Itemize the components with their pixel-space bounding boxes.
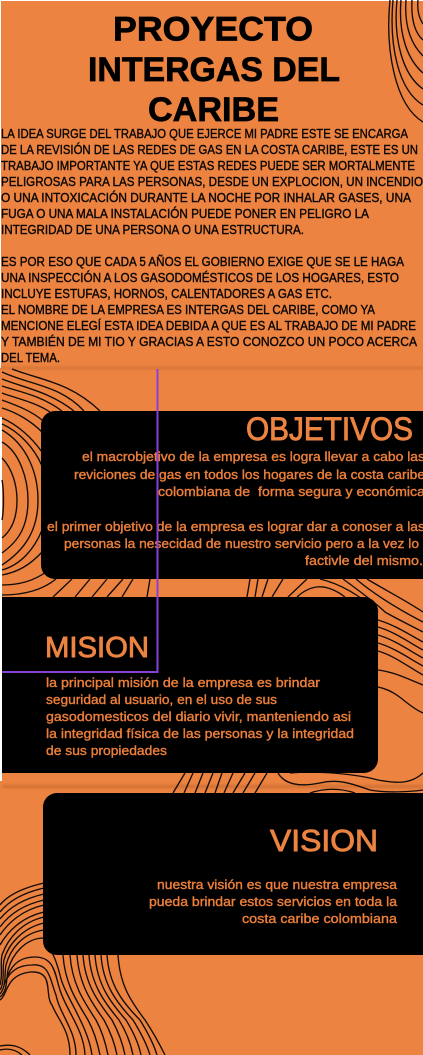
intro text block: UNA INSPECCIÓN A LOS GASODOMÉSTICOS DE LOS HOGARES, ESTO [1,270,399,285]
heading: vision: VISION [270,823,378,858]
section shadows [0,367,423,788]
mision text: de sus propiedades [46,743,168,758]
objetivos text: personas la nesecidad de nuestro servicio pero a la vez lo [64,536,419,551]
purple frame line [2,369,158,672]
contour lines: bottom left [0,883,165,1055]
vision text: pueda brindar estos servicios en toda la [149,894,398,909]
mision text [46,675,354,758]
objetivos text: colombiana de forma segura y económica [158,484,423,499]
contour lines: middle left [2,369,150,597]
vision text [149,877,398,926]
title: INTERGAS DEL [88,51,340,89]
mision text: seguridad al usuario, en el uso de sus [46,692,278,707]
title: PROYECTO [113,10,313,48]
top and left page edge [0,0,423,781]
contour lines: top right [389,0,423,122]
panel: objetivos [41,411,423,579]
vision text: costa caribe colombiana [242,911,398,926]
contour lines: middle right [173,579,423,793]
objetivos text: el macrobjetivo de la empresa es logra llevar a cabo las [82,449,423,464]
intro text block: DEL TEMA. [1,351,60,365]
intro text block [1,127,423,365]
objetivos text: factivle del mismo. [305,553,423,568]
heading: objetivos: OBJETIVOS [246,411,413,447]
mision text: gasodomesticos del diario vivir, manteniendo asi [46,709,351,724]
objetivos text: el primer objetivo de la empresa es lograr dar a conoser a las [47,519,423,534]
intro text block: O UNA INTOXICACIÓN DURANTE LA NOCHE POR INHALAR GASES, UNA [1,190,412,205]
intro text block: Y TAMBIÉN DE MI TIO Y GRACIAS A ESTO CONOZCO UN POCO ACERCA [1,334,418,349]
title: CARIBE [148,91,279,129]
intro text block: INCLUYE ESTUFAS, HORNOS, CALENTADORES A GAS ETC. [1,287,332,301]
vision text: nuestra visión es que nuestra empresa [157,877,398,892]
intro text block: INTEGRIDAD DE UNA PERSONA O UNA ESTRUCTURA. [1,223,304,237]
panel: mision [2,597,378,773]
panel: vision [43,793,423,955]
objetivos text: reviciones de gas en todos los hogares de la costa caribe [74,467,423,482]
objetivos text [47,449,423,568]
intro text block: EL NOMBRE DE LA EMPRESA ES INTERGAS DEL CARIBE, COMO YA [1,303,376,317]
intro text block: FUGA O UNA MALA INSTALACIÓN PUEDE PONER EN PELIGRO LA [1,206,370,221]
heading: mision: MISION [45,632,149,664]
mision text: la principal misión de la empresa es brindar [46,675,321,690]
mision text: la integridad física de las personas y la integridad [46,726,354,741]
title [88,10,340,129]
